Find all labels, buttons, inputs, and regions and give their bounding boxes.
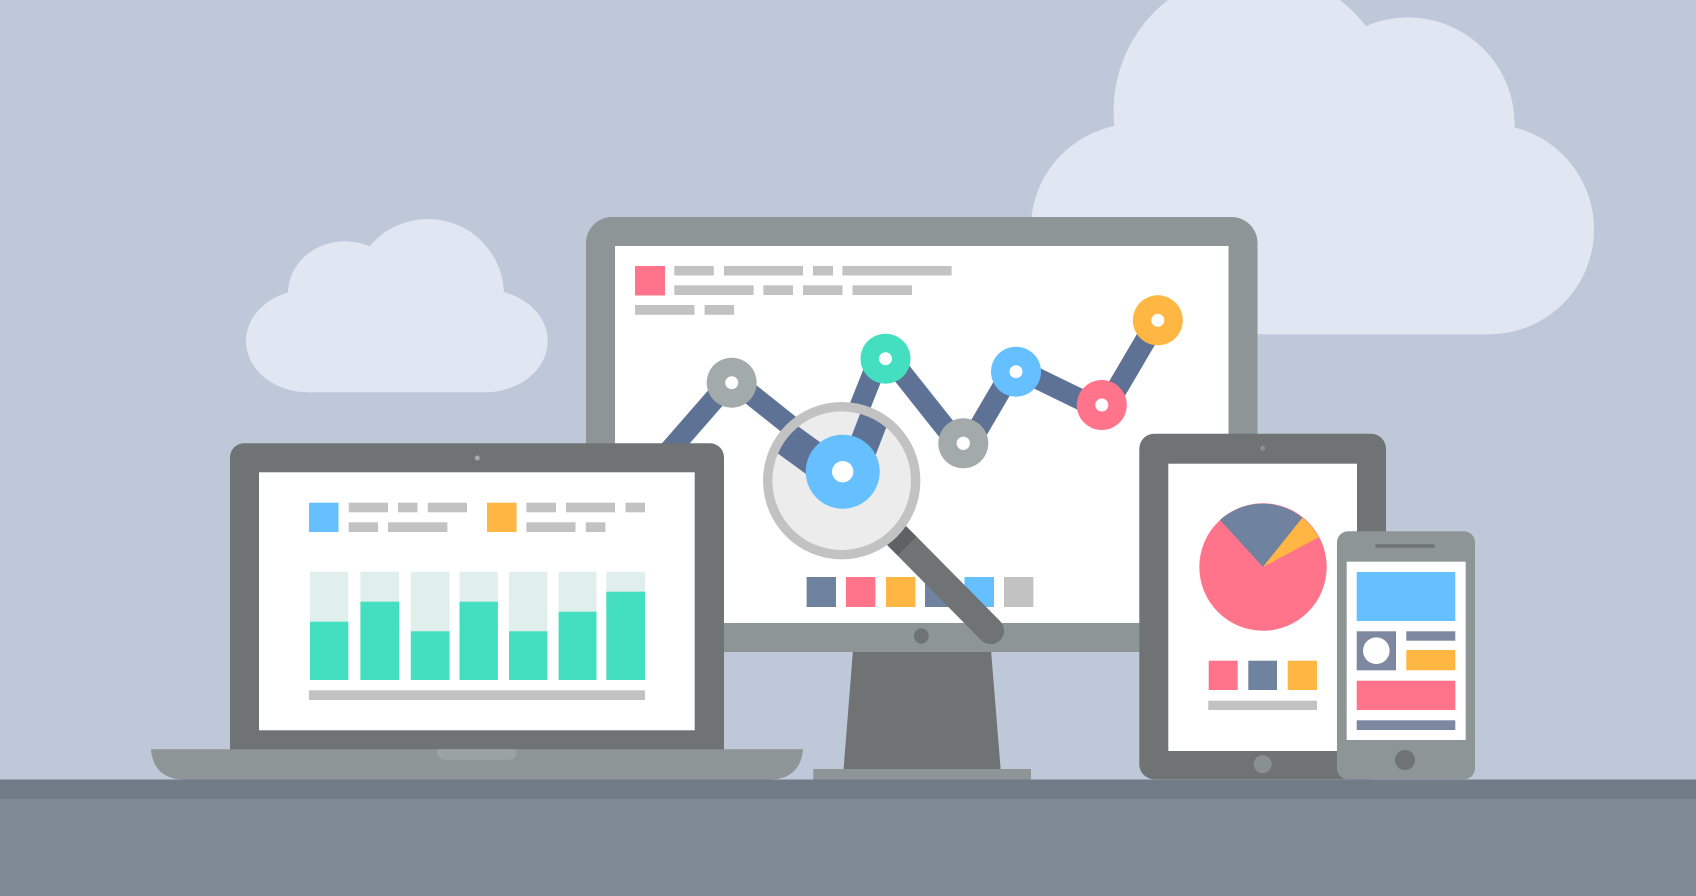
magnified chart lines [778,414,886,474]
chart node: red [1077,380,1127,430]
phone navy bar [1406,631,1455,641]
phone blue banner [1357,572,1455,621]
chart line segments [650,324,1155,473]
tablet body [1139,434,1386,779]
cloud: large right [1031,0,1594,334]
tablet legend squares [1209,661,1317,690]
header text lines [635,266,952,315]
laptop legend: blue [309,503,467,532]
chart node: blue [991,347,1041,397]
laptop screen [259,472,695,730]
pie chart [1199,503,1327,631]
desktop monitor [586,217,1258,780]
phone bottom bar [1357,720,1455,730]
magnifier handle collar [877,516,917,556]
monitor camera button [914,628,929,644]
header square [635,266,665,296]
line chart [650,295,1183,473]
monitor screen [615,246,1228,623]
phone body [1337,531,1475,779]
magnifier handle [898,537,1004,644]
tablet home button [1254,755,1272,773]
monitor body [586,217,1258,652]
tablet camera [1260,446,1265,451]
laptop [151,443,803,780]
chart node: grey low [938,418,988,468]
bar chart [310,572,645,680]
phone [1337,531,1475,779]
phone red block [1357,681,1455,710]
laptop lid [230,443,724,750]
chart node: grey [707,358,757,408]
tablet screen [1168,464,1357,751]
tablet [1139,434,1386,779]
phone orange bar [1406,650,1455,670]
magnifying glass [762,401,1004,644]
phone screen [1347,562,1466,740]
monitor legend squares [807,577,1033,607]
phone home button [1395,750,1415,770]
monitor stand base [813,769,1031,780]
tablet legend bar [1208,701,1317,710]
laptop base [151,749,803,780]
monitor header block [635,266,952,315]
chart node: orange [1133,295,1183,345]
cloud: small left [246,219,548,392]
monitor stand [844,650,1001,770]
laptop legend: orange [487,503,645,532]
chart node: teal [860,334,910,384]
ground [0,780,1696,896]
phone speaker [1375,544,1435,548]
magnifier lens [762,401,920,559]
laptop camera [475,456,480,460]
laptop notch [437,749,517,760]
phone avatar [1357,631,1396,670]
magnified blue node [806,435,880,509]
bar chart axis [309,690,645,700]
